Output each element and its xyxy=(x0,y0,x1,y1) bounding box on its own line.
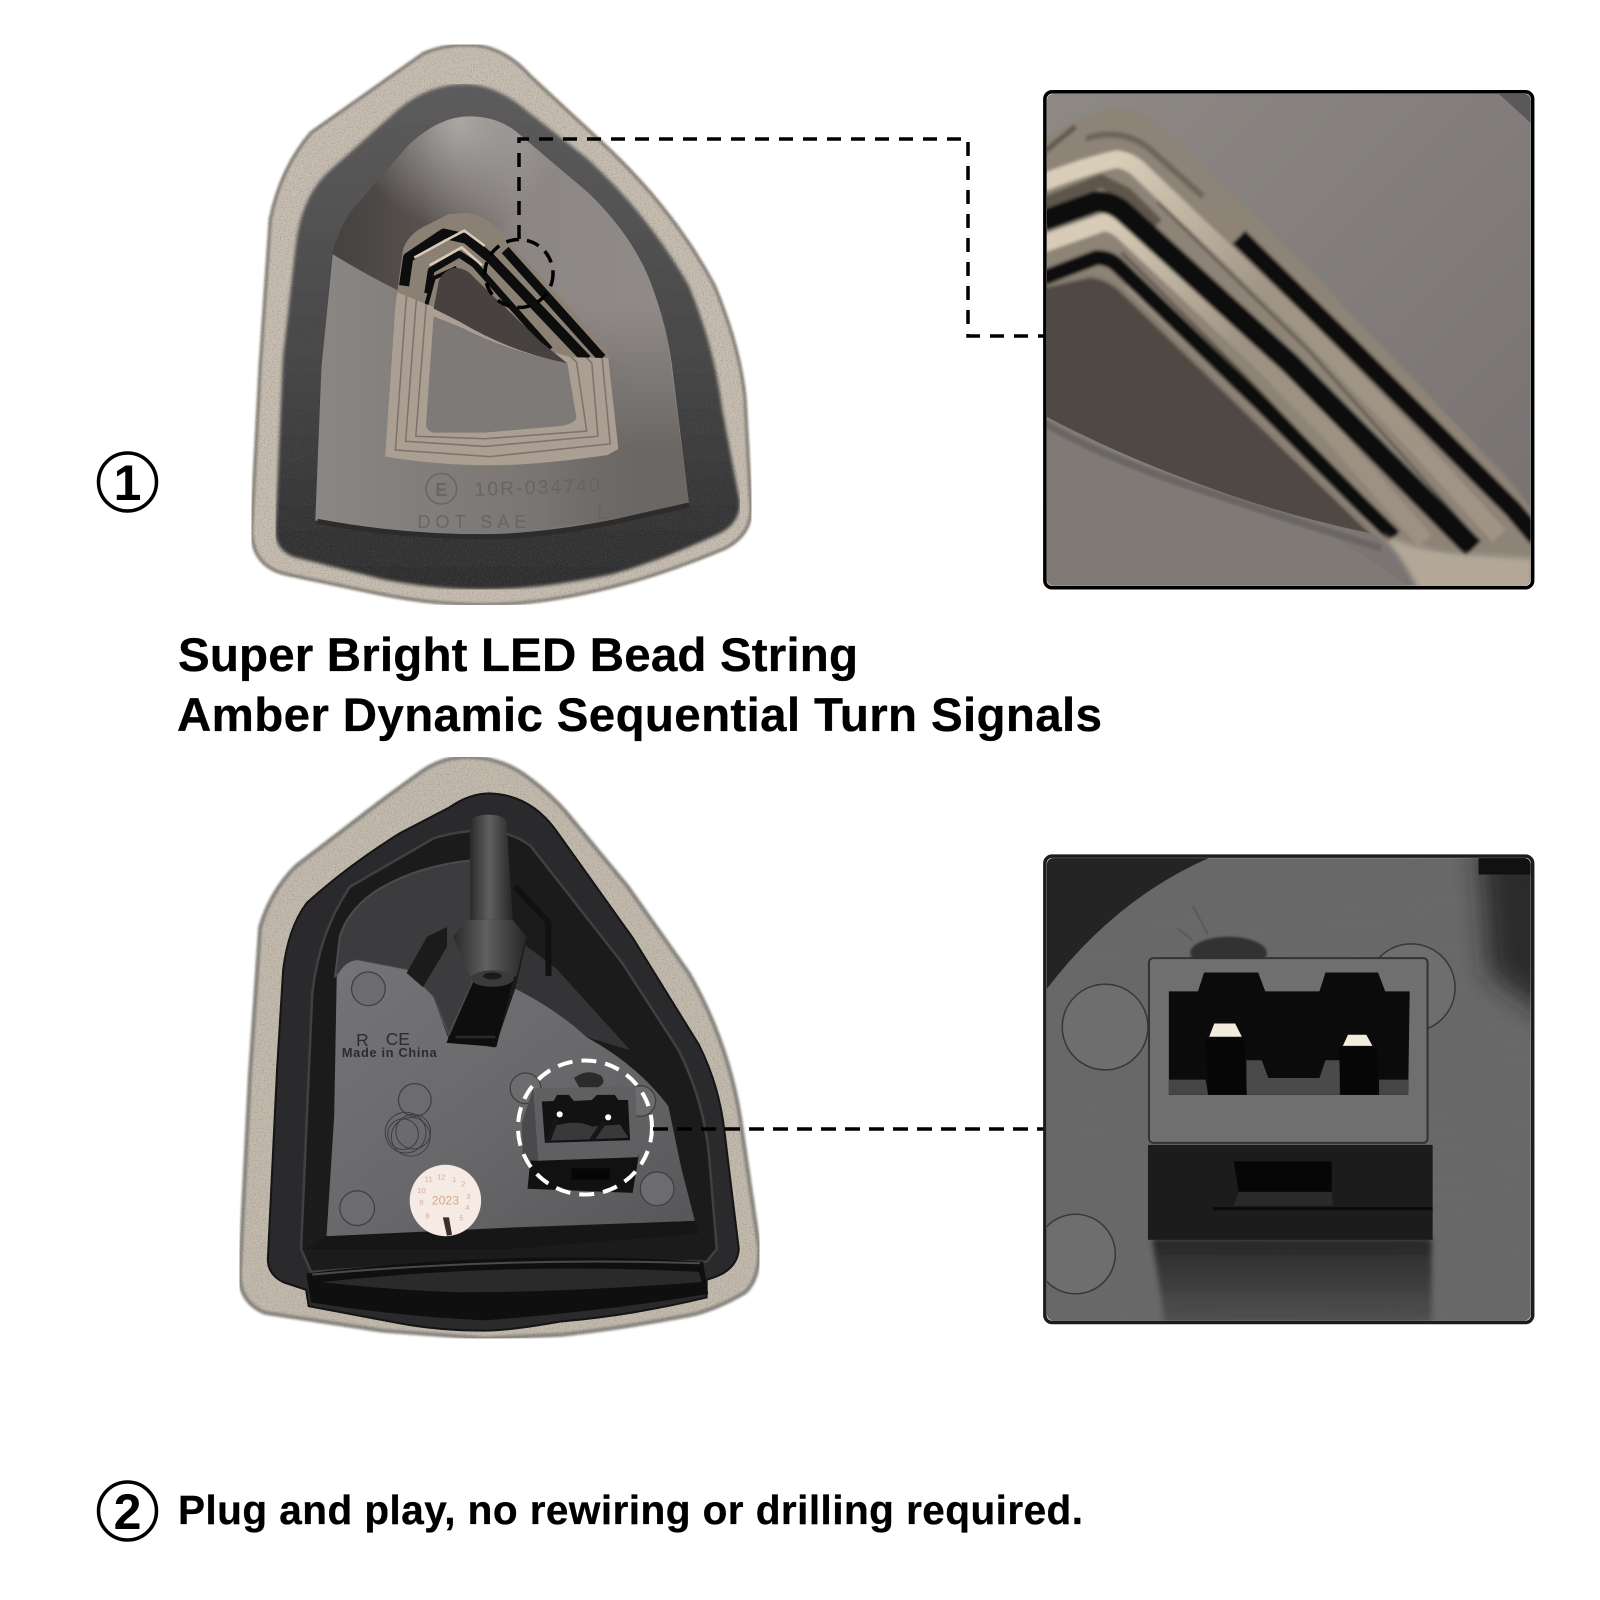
date sticker: 2 xyxy=(461,1180,465,1189)
badge: number 1: 1 xyxy=(114,455,141,511)
wire tube and socket xyxy=(446,815,527,1047)
shadow below connector xyxy=(1152,1239,1432,1322)
date sticker: 1 xyxy=(452,1175,456,1184)
plate swirl mark xyxy=(385,1112,431,1156)
date sticker: 11 xyxy=(425,1175,433,1184)
brushed texture xyxy=(1045,856,1533,1322)
wire grommet xyxy=(407,927,447,987)
lens approval marks: E xyxy=(435,479,447,500)
lens approval marks: L xyxy=(597,501,608,523)
connector pin left xyxy=(1206,1023,1247,1095)
plate markings xyxy=(342,1029,438,1060)
product photo: sequential lamp, back side xyxy=(240,757,759,1338)
lower grey lens area xyxy=(1045,413,1417,592)
lens outer rim xyxy=(252,45,751,605)
heading: bead string and turn signals xyxy=(177,629,1102,742)
sealing bar xyxy=(306,1257,708,1320)
badge: number 1 xyxy=(98,453,156,511)
heading: bead string and turn signals: Super Bright LED Bead String xyxy=(178,629,858,682)
date sticker: 3 xyxy=(466,1192,470,1201)
date sticker: 9 xyxy=(419,1198,424,1207)
plate markings: CE xyxy=(386,1029,410,1049)
connector bump xyxy=(574,1072,603,1087)
inner dark wedge xyxy=(1045,277,1370,533)
lens approval marks: 10R-034740 xyxy=(474,475,600,501)
plate markings: Made in China xyxy=(342,1045,438,1060)
right side shadow xyxy=(1464,858,1531,1024)
panel frame xyxy=(1045,92,1533,588)
tray right slope xyxy=(515,945,630,1050)
detail panel: LED bead string close-up xyxy=(1043,92,1537,592)
corner sliver of frosted band xyxy=(1499,94,1533,125)
lens inner window xyxy=(315,116,689,537)
callout circle: connector, white dashed xyxy=(518,1060,652,1194)
connector face xyxy=(1149,958,1428,1143)
date sticker: 4 xyxy=(465,1203,470,1212)
top right dark corner xyxy=(1478,858,1531,874)
LED stripe stack xyxy=(1043,108,1537,561)
date sticker: 8 xyxy=(425,1211,430,1220)
caption: plug and play: Plug and play, no rewiring or drilling required. xyxy=(178,1487,1083,1533)
connector line to plug detail xyxy=(653,1127,1045,1131)
moulded circles xyxy=(1036,944,1455,1294)
solder bump xyxy=(1177,906,1268,958)
date sticker: 12 xyxy=(437,1173,446,1182)
product photo: sequential lamp lens, front xyxy=(252,45,751,605)
black gasket xyxy=(268,793,739,1331)
circuit plate xyxy=(327,960,695,1236)
date sticker: 2023 xyxy=(432,1194,459,1208)
connector xyxy=(522,1087,639,1193)
rear rim xyxy=(240,757,759,1338)
tray interior xyxy=(301,831,717,1272)
plate markings: R xyxy=(356,1030,369,1050)
panel frame xyxy=(1045,856,1533,1322)
badge: number 2: 2 xyxy=(114,1484,141,1540)
plate moulded circles xyxy=(340,972,674,1226)
connector lower block xyxy=(1148,1145,1433,1240)
detail panel: connector close-up xyxy=(1043,854,1534,1324)
panel background xyxy=(1045,856,1533,1322)
callout circle: LED string, black dashed xyxy=(485,240,553,308)
date sticker: 5 xyxy=(459,1213,463,1222)
lens approval marks: DOT SAE xyxy=(417,511,527,532)
connector pin right xyxy=(1339,1035,1379,1095)
tray upper slope xyxy=(335,860,472,1035)
lower area curve highlight xyxy=(1045,423,1382,548)
plate bottom shadow xyxy=(306,1221,699,1249)
lens dark frosted band xyxy=(276,84,740,589)
connector line to LED detail xyxy=(519,139,1045,336)
stripes fading into light lower band xyxy=(1380,533,1533,592)
date sticker xyxy=(410,1165,481,1236)
badge: number 2 xyxy=(98,1482,156,1540)
wire channel xyxy=(515,887,548,976)
panel background xyxy=(1045,92,1533,588)
dark tray arc xyxy=(1045,856,1213,991)
date sticker: 10 xyxy=(417,1186,426,1195)
heading: bead string and turn signals: Amber Dynamic Sequential Turn Signals xyxy=(177,689,1102,742)
LED bead string ring xyxy=(385,213,618,465)
lens approval marks xyxy=(417,473,608,532)
